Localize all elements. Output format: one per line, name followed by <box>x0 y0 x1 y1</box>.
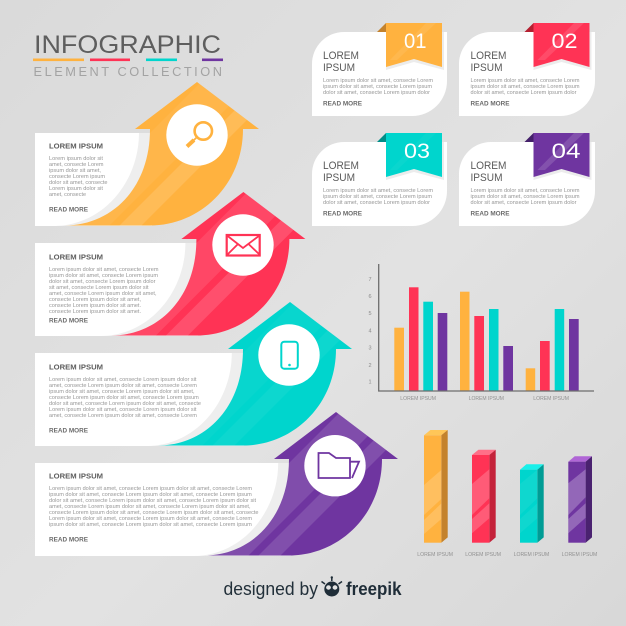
y axis ticks: 7 <box>368 277 372 283</box>
card 04: LOREM <box>470 160 506 172</box>
footer credit <box>224 576 402 599</box>
card 04: ipsum dolor sit amet, consecte Lorem ipsum <box>470 194 580 200</box>
text card 1 <box>35 133 152 226</box>
text card 1: ipsum dolor sit amet, <box>49 168 102 174</box>
text card 4: dolor sit amet, consecte Lorem ipsum dolor sit amet, consecte Lorem ipsum dolor sit <box>49 498 257 504</box>
card 03: ipsum dolor sit amet, consecte Lorem ipsum <box>323 194 433 200</box>
text card 1: READ MORE <box>49 206 89 214</box>
card 02: ipsum dolor sit amet, consecte Lorem ipsum <box>470 84 580 90</box>
3d bar red <box>465 450 501 558</box>
arrow shape <box>112 192 306 336</box>
bars group 2 <box>460 292 513 391</box>
text card 3: Lorem ipsum dolor sit amet, consecte Lorem ipsum dolor sit <box>49 407 197 413</box>
ribbon 02: 02 <box>552 30 578 53</box>
footer credit: designed by <box>224 579 318 599</box>
card 03: Lorem ipsum dolor sit amet, consecte Lorem <box>323 188 434 194</box>
text card 4: ipsum dolor sit amet, consecte Lorem ipsum dolor sit amet, consecte Lorem ipsum <box>49 492 252 498</box>
x axis labels: LOREM IPSUM <box>400 396 436 402</box>
3d bar orange: LOREM IPSUM <box>417 552 453 558</box>
text card 2: ipsum dolor sit amet, consecte Lorem ipsum <box>49 273 159 279</box>
icon: phone <box>258 324 320 386</box>
card 03: IPSUM <box>323 172 355 184</box>
text card 2: sit amet, consecte Lorem ipsum dolor sit <box>49 285 149 291</box>
text card 4: READ MORE <box>49 536 89 544</box>
x axis labels: LOREM IPSUM <box>533 396 569 402</box>
ribbon 04: 04 <box>552 140 581 163</box>
card 01: IPSUM <box>323 62 355 74</box>
text card 3: LOREM IPSUM <box>49 362 103 372</box>
panel: arrow 4 purple <box>35 412 398 556</box>
y axis ticks <box>368 277 372 386</box>
text card 3: READ MORE <box>49 428 89 434</box>
text card 4: consecte Lorem ipsum dolor sit amet, consecte Lorem ipsum dolor sit amet, consecte <box>49 510 258 516</box>
icon: magnifier <box>166 104 228 166</box>
panel: arrow 2 red <box>35 192 306 336</box>
text card 4: Lorem ipsum dolor sit amet, consecte Lorem ipsum dolor sit amet, consecte Lorem <box>49 486 253 492</box>
ribbon 01: 01 <box>404 30 426 53</box>
text card 1: amet, consecte <box>49 192 86 198</box>
footer credit: freepik <box>346 578 402 599</box>
y axis ticks: 4 <box>368 328 372 334</box>
card 01: LOREM <box>323 50 359 62</box>
arrow shape <box>158 302 352 446</box>
text card 4: Lorem ipsum dolor sit amet, consecte Lorem ipsum dolor sit amet, consecte Lorem <box>49 516 253 522</box>
text card 2 <box>35 243 198 336</box>
arrow shape <box>66 82 259 226</box>
y axis ticks: 5 <box>368 311 372 317</box>
panel: arrow 3 teal <box>35 302 352 446</box>
card 04: IPSUM <box>470 172 502 184</box>
text card 4: amet, consecte Lorem ipsum dolor sit amet, consecte Lorem ipsum dolor sit amet, <box>49 504 251 510</box>
text card 2: consecte Lorem ipsum dolor sit amet. <box>49 309 141 315</box>
heading: infographic: INFOGRAPHIC <box>34 32 221 59</box>
text card 1: consecte Lorem ipsum <box>49 174 106 180</box>
3d bar orange <box>417 430 453 558</box>
card 03: LOREM <box>323 160 359 172</box>
panel: arrow 1 orange <box>35 82 259 226</box>
card 03: READ MORE <box>323 210 363 218</box>
text card 4: LOREM IPSUM <box>49 472 103 480</box>
x axis labels <box>400 396 569 402</box>
text card 3: amet, consecte Lorem ipsum dolor sit amet, consecte Lorem <box>49 383 197 389</box>
text card 3: consecte Lorem ipsum dolor sit amet, consecte Lorem ipsum <box>49 395 199 401</box>
card 03: dolor sit amet, consecte Lorem ipsum dolor <box>323 200 430 206</box>
colour rule under title <box>33 58 223 61</box>
card 04: Lorem ipsum dolor sit amet, consecte Lorem <box>470 188 580 194</box>
text card 3: Lorem ipsum dolor sit amet, consecte Lorem ipsum dolor sit <box>49 377 197 383</box>
card 01: dolor sit amet, consecte Lorem ipsum dolor <box>323 90 430 96</box>
icon: folder <box>304 435 366 496</box>
y axis ticks: 1 <box>368 380 372 386</box>
card 04 <box>459 133 595 226</box>
text card 2: dolor sit amet, consecte Lorem ipsum dolor <box>49 279 156 285</box>
3d bar teal <box>514 464 549 558</box>
axes <box>379 264 594 391</box>
text card 2: LOREM IPSUM <box>49 252 103 262</box>
text card 3: ipsum dolor sit amet, consecte Lorem ipsum dolor sit amet, <box>49 389 195 395</box>
3d bar purple: LOREM IPSUM <box>562 552 597 558</box>
3d bar red: LOREM IPSUM <box>465 552 501 558</box>
card 02 <box>459 23 595 116</box>
card 01 <box>312 23 447 116</box>
text card 2: Lorem ipsum dolor sit amet, consecte Lorem <box>49 267 159 273</box>
text card 2: consecte Lorem ipsum dolor sit amet. <box>49 303 141 309</box>
text card 3: dolor sit amet, consecte Lorem ipsum dolor sit amet, consecte <box>49 401 201 407</box>
bars group 1 <box>394 287 447 391</box>
text card 2: consecte Lorem ipsum dolor sit amet, <box>49 297 142 303</box>
icon: envelope <box>212 214 274 276</box>
card 01: Lorem ipsum dolor sit amet, consecte Lorem <box>323 78 434 84</box>
card 03 <box>312 133 447 226</box>
text card 1: Lorem ipsum dolor sit <box>49 186 104 192</box>
card 02: LOREM <box>470 50 506 62</box>
text card 1: LOREM IPSUM <box>49 142 103 150</box>
card 01: ipsum dolor sit amet, consecte Lorem ipsum <box>323 84 433 90</box>
card 02: READ MORE <box>470 100 510 108</box>
icon: freepik mascot <box>322 576 342 596</box>
text card 4: ipsum dolor sit amet, consecte Lorem ipsum dolor sit amet, consecte Lorem ipsum <box>49 522 252 528</box>
card 04: dolor sit amet, consecte Lorem ipsum dolor <box>470 200 577 206</box>
card 04: READ MORE <box>470 210 510 218</box>
3d bar chart <box>417 430 597 558</box>
text card 2: READ MORE <box>49 318 89 324</box>
card 01: READ MORE <box>323 100 363 108</box>
text card 1: Lorem ipsum dolor sit <box>49 156 104 162</box>
text card 2: amet, consecte Lorem ipsum dolor sit amet, <box>49 291 157 297</box>
text card 3 <box>35 353 244 446</box>
text card 1: dolor sit amet, consecte <box>49 180 108 186</box>
card 02: Lorem ipsum dolor sit amet, consecte Lorem <box>470 78 580 84</box>
card 02: dolor sit amet, consecte Lorem ipsum dolor <box>470 90 577 96</box>
3d bar teal: LOREM IPSUM <box>514 552 549 558</box>
bar chart <box>368 264 594 402</box>
x axis labels: LOREM IPSUM <box>469 396 504 402</box>
text card 3: amet, consecte Lorem ipsum dolor sit amet, consecte Lorem <box>49 413 197 419</box>
y axis ticks: 3 <box>368 346 372 352</box>
text card 1: amet, consecte Lorem <box>49 162 104 168</box>
y axis ticks: 6 <box>368 294 372 300</box>
card 02: IPSUM <box>470 62 502 74</box>
3d bar purple <box>562 456 597 558</box>
ribbon 03: 03 <box>404 140 430 163</box>
title block <box>33 32 223 79</box>
subtitle: ELEMENT COLLECTION <box>34 64 222 79</box>
bars group 3 <box>526 309 579 391</box>
arrow shape <box>208 412 398 556</box>
text card 4 <box>35 463 291 556</box>
y axis ticks: 2 <box>368 363 372 369</box>
